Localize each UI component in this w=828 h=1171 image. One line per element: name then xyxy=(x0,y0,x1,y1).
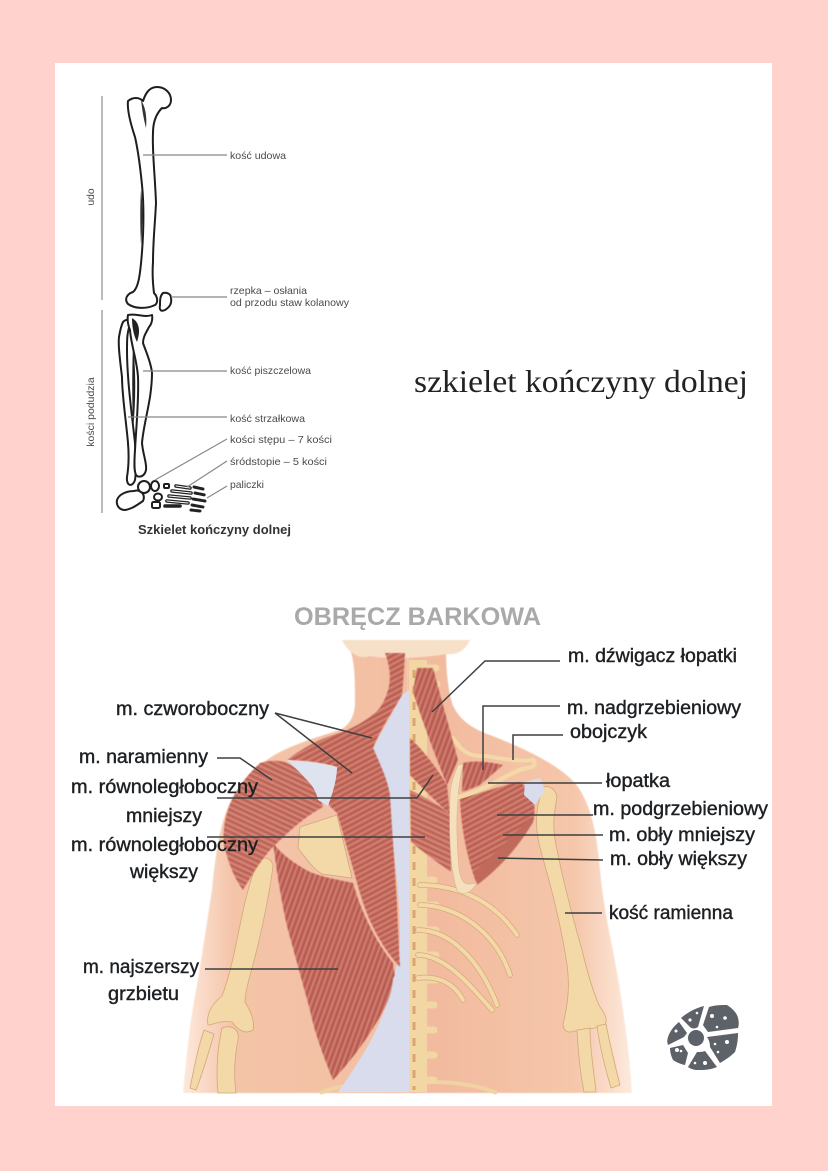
right forearm bones xyxy=(577,1028,596,1092)
title: szkielet kończyny dolnej: szkielet kończyny dolnej xyxy=(414,363,748,399)
label: m. obły mniejszy: m. obły mniejszy xyxy=(609,825,756,846)
right forearm second bone xyxy=(597,1024,620,1088)
bone: patella xyxy=(160,293,171,311)
label: kość strzałkowa: kość strzałkowa xyxy=(230,413,305,425)
muscle: rhomboids xyxy=(410,790,451,872)
femur shading xyxy=(140,100,146,245)
label: kość udowa: kość udowa xyxy=(230,150,286,162)
label: m. obły większy: m. obły większy xyxy=(610,849,748,870)
label: m. podgrzebieniowy: m. podgrzebieniowy xyxy=(593,799,769,820)
label: kości podudzia: kości podudzia xyxy=(85,377,97,447)
muscle: supraspinatus xyxy=(462,762,503,792)
label: m. naramienny: m. naramienny xyxy=(79,747,209,768)
body silhouette left xyxy=(183,648,408,1093)
illustration: shoulder girdle anatomy xyxy=(71,640,769,1093)
label: paliczki: paliczki xyxy=(230,479,264,491)
icon: bone cross-section logo xyxy=(667,1005,739,1070)
left humerus and forearm xyxy=(190,858,273,1093)
ribs xyxy=(418,885,517,1010)
bracket: lower leg xyxy=(101,310,103,513)
scapular spine and acromion xyxy=(459,760,535,797)
muscle: deltoid xyxy=(224,761,323,890)
muscle: levator scapulae xyxy=(413,668,458,785)
label: śródstopie: śródstopie – 5 kości xyxy=(230,456,327,468)
label: większy: większy xyxy=(129,862,199,883)
left scapula xyxy=(298,815,352,878)
label: m. równoległoboczny większy: m. równoległoboczny xyxy=(71,835,259,856)
tibia shading xyxy=(132,318,139,430)
bone: fibula xyxy=(119,320,136,485)
label: kość piszczelowa: kość piszczelowa xyxy=(230,365,311,377)
label: kość ramienna: kość ramienna xyxy=(609,903,733,924)
label: rzepka: rzepka – osłania xyxy=(230,285,307,297)
chin band xyxy=(342,640,470,658)
body silhouette right xyxy=(408,648,632,1093)
tendon: right shoulder xyxy=(524,778,545,805)
white panel xyxy=(55,63,772,1106)
muscle: upper deep back xyxy=(410,738,450,815)
label: łopatka: łopatka xyxy=(606,771,670,792)
right scapula medial border xyxy=(450,764,477,893)
bone: femur xyxy=(126,87,171,308)
tendon: shoulder xyxy=(287,760,337,806)
aponeurosis left xyxy=(338,690,409,1092)
label: rzepka second line: od przodu staw kolanowy xyxy=(230,297,350,309)
muscle: latissimus dorsi xyxy=(273,843,395,1080)
spine xyxy=(409,660,437,1092)
label: mniejszy: mniejszy xyxy=(126,806,203,827)
bracket: thigh xyxy=(101,96,103,300)
leader lines xyxy=(128,155,227,498)
label: m. dźwigacz łopatki: m. dźwigacz łopatki xyxy=(568,646,737,667)
label: kości stępu: kości stępu – 7 kości xyxy=(230,434,332,446)
label: m. czworoboczny: m. czworoboczny xyxy=(116,699,270,720)
muscle: infraspinatus xyxy=(460,782,534,882)
diagram: lower limb skeleton xyxy=(85,87,350,537)
heading: OBRĘCZ BARKOWA: OBRĘCZ BARKOWA xyxy=(294,603,541,631)
pelvis hint xyxy=(320,1082,497,1093)
label: udo: udo xyxy=(85,188,97,206)
label: obojczyk: obojczyk xyxy=(570,722,648,743)
muscle: teres xyxy=(474,818,533,885)
bone: foot xyxy=(117,481,205,511)
right clavicle xyxy=(453,738,533,761)
label: m. równoległoboczny mniejszy: m. równoległoboczny xyxy=(71,777,259,798)
bone: tibia xyxy=(128,315,152,477)
leader lines xyxy=(205,661,603,969)
right humerus xyxy=(536,787,606,1032)
label: grzbietu: grzbietu xyxy=(108,984,179,1005)
diagram caption: Szkielet kończyny dolnej xyxy=(138,522,291,537)
label: m. najszerszy: m. najszerszy xyxy=(83,957,199,978)
label: m. nadgrzebieniowy: m. nadgrzebieniowy xyxy=(567,698,742,719)
muscle: trapezius xyxy=(287,653,405,967)
